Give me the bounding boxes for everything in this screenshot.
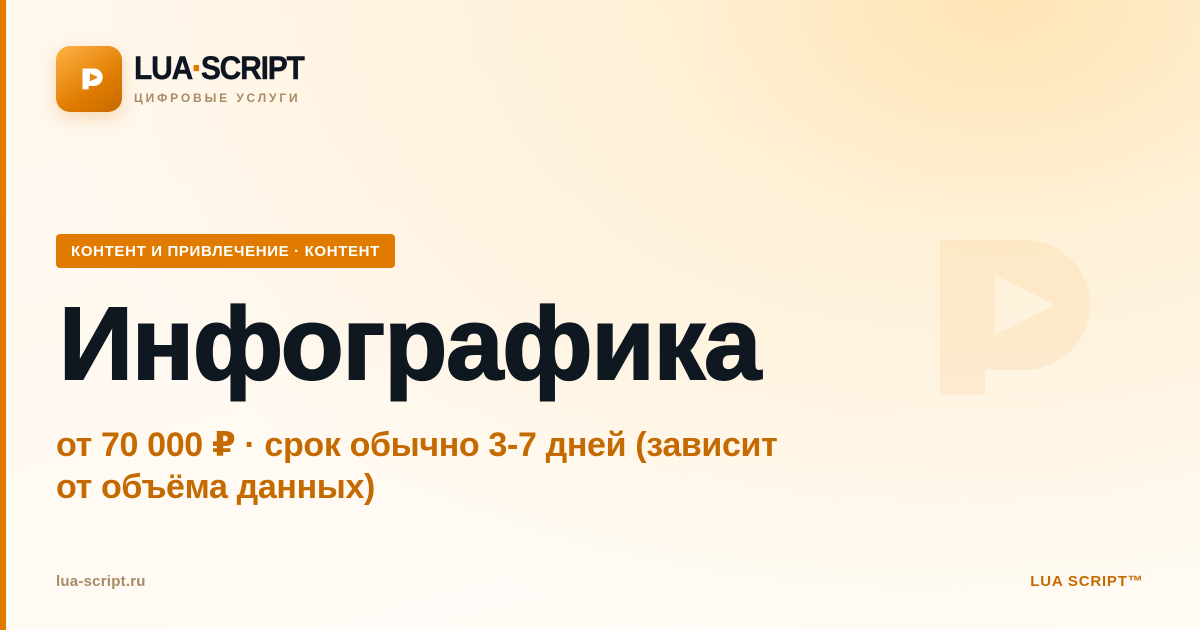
left accent bar	[0, 0, 6, 630]
subtitle: от 70 000 ₽ · срок обычно 3-7 дней (зависит	[56, 426, 777, 464]
brand tagline: ЦИФРОВЫЕ УСЛУГИ	[134, 91, 300, 105]
category badge: КОНТЕНТ И ПРИВЛЕЧЕНИЕ · КОНТЕНТ	[71, 243, 380, 260]
subtitle	[56, 426, 777, 506]
icon: logo tile	[56, 46, 122, 112]
title: Инфографика	[59, 286, 760, 401]
footer: site url: lua-script.ru	[56, 573, 146, 590]
footer: trademark: LUA SCRIPT™	[1030, 573, 1144, 590]
brand logo lockup	[46, 42, 305, 128]
brand name: LUA·SCRIPT	[134, 51, 304, 86]
category badge	[56, 234, 395, 268]
subtitle: от объёма данных)	[56, 468, 375, 506]
